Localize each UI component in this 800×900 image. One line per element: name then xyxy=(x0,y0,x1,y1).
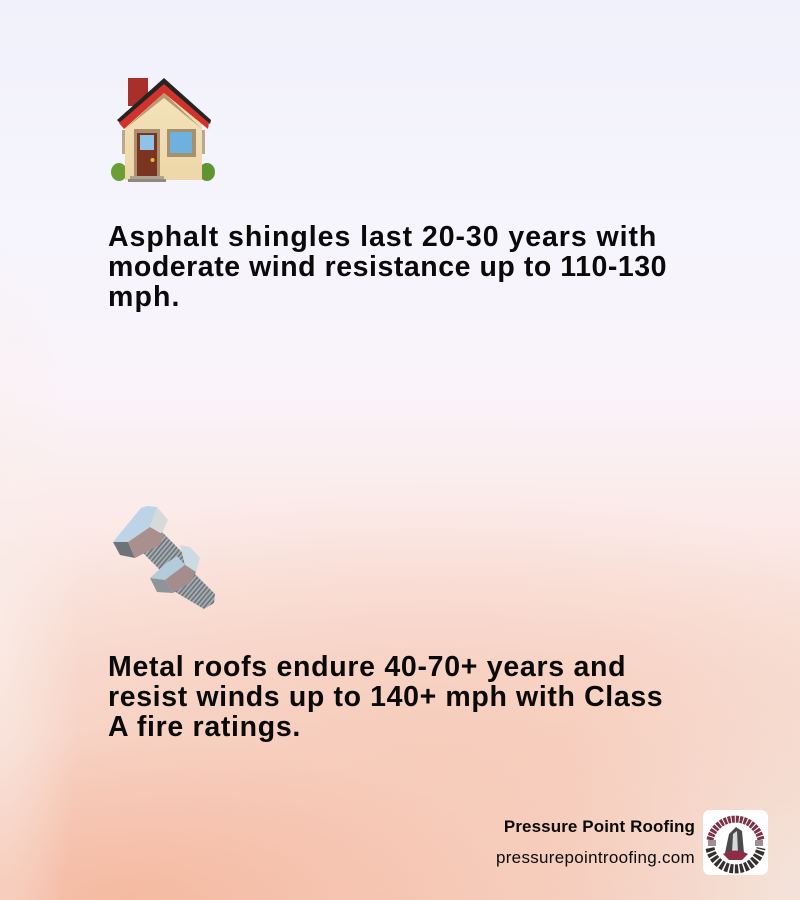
logo xyxy=(703,810,768,875)
icon: house xyxy=(111,78,215,182)
brand name: Pressure Point Roofing xyxy=(504,817,695,836)
text: metal roofs xyxy=(108,651,663,743)
text: metal roofs: Metal roofs endure 40-70+ years and xyxy=(108,651,626,683)
text: asphalt shingles: Asphalt shingles last 20-30 years with xyxy=(108,221,657,253)
text: asphalt shingles: moderate wind resistance up to 110-130 xyxy=(108,251,667,283)
text: metal roofs: resist winds up to 140+ mph with Class xyxy=(108,681,663,713)
website url: pressurepointroofing.com xyxy=(496,848,695,867)
icon: bolt and nut xyxy=(113,506,215,609)
text: asphalt shingles xyxy=(108,221,667,313)
text: metal roofs: A fire ratings. xyxy=(108,711,301,743)
text: asphalt shingles: mph. xyxy=(108,281,180,313)
